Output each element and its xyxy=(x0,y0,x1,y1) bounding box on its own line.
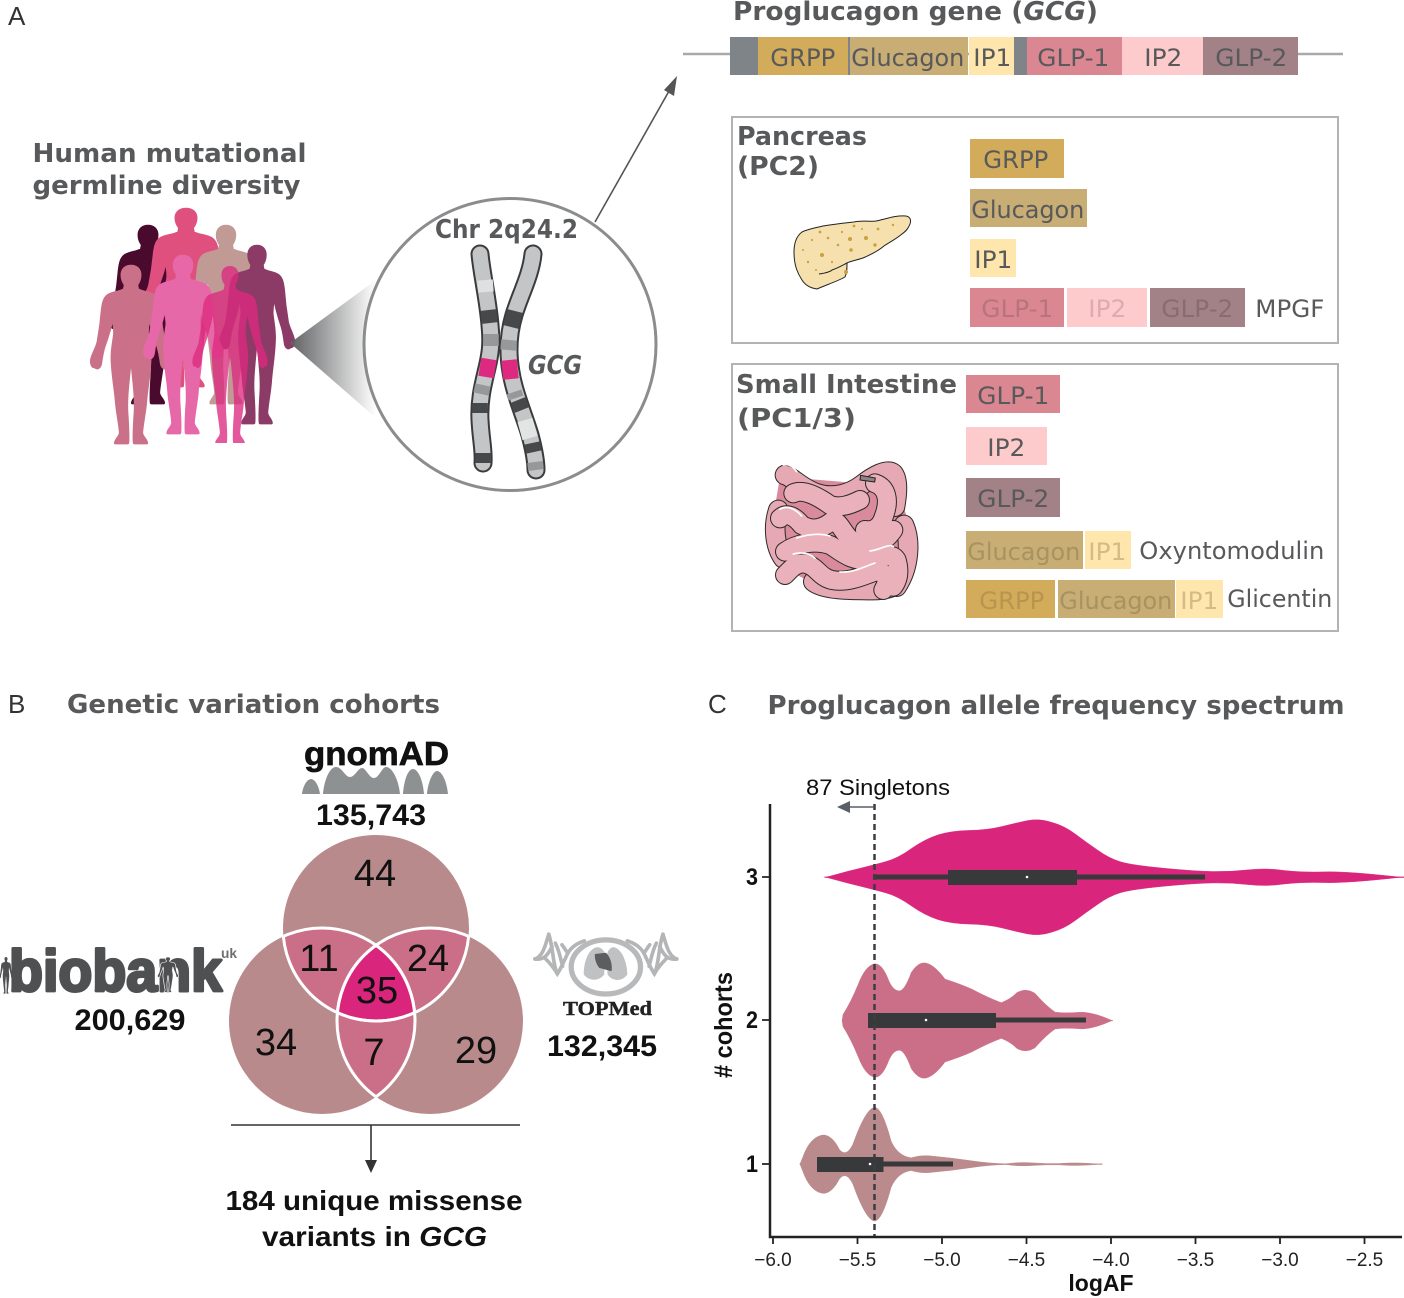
icon: chromosome xyxy=(480,254,536,470)
heading: human mutational germline diversity xyxy=(32,139,306,201)
zoom fan from people to chromosome lens xyxy=(290,280,376,418)
text: summary: 184 unique missense xyxy=(226,1185,522,1216)
venn counts: 7 xyxy=(363,1032,385,1074)
heading: small intestine PC1/3: Small Intestine xyxy=(736,370,957,400)
x tick labels: −4.5 xyxy=(1008,1250,1045,1271)
chart: venn diagram xyxy=(229,835,523,1114)
y tick labels: 3 xyxy=(746,864,758,891)
bars: oxyntomodulin: Glucagon xyxy=(967,538,1080,566)
heading: small intestine PC1/3 xyxy=(736,370,957,434)
heading: human mutational germline diversity: Human mutational xyxy=(32,139,306,169)
heading: pancreas PC2 xyxy=(737,122,867,182)
panel: pancreas xyxy=(732,117,1338,343)
chromosome lens circle xyxy=(364,198,656,490)
count: TOPMed: 132,345 xyxy=(547,1030,657,1063)
x tick labels: −6.0 xyxy=(754,1250,792,1271)
bars: oxyntomodulin: IP1 xyxy=(1088,538,1126,566)
logo: gnomAD xyxy=(302,735,449,794)
bars: MPGF fragments: GLP-2 xyxy=(1161,295,1233,323)
bars: oxyntomodulin xyxy=(966,531,1324,569)
axes xyxy=(762,804,1402,1244)
bars: oxyntomodulin: Oxyntomodulin xyxy=(1139,537,1324,565)
bar: GLP-2 xyxy=(966,478,1060,517)
x tick labels: −3.0 xyxy=(1261,1250,1299,1271)
bars: glicentin: GRPP xyxy=(979,587,1044,615)
violin: 1 cohort xyxy=(800,1107,1102,1221)
heading: pancreas PC2: (PC2) xyxy=(737,152,819,182)
bar: IP2: IP2 xyxy=(987,434,1025,462)
x tick labels: −2.5 xyxy=(1346,1250,1383,1271)
bars: MPGF fragments xyxy=(970,288,1324,327)
count: gnomAD: 135,743 xyxy=(316,799,426,832)
bar: IP1: IP1 xyxy=(974,246,1012,274)
venn counts: 44 xyxy=(354,853,396,895)
bars: glicentin: IP1 xyxy=(1180,587,1218,615)
gene diagram: GLP-2 xyxy=(1215,44,1287,72)
venn counts: 29 xyxy=(455,1030,497,1072)
logo: TOPMed: TOPMed xyxy=(563,998,652,1020)
text: summary xyxy=(226,1185,522,1252)
panel label C: C xyxy=(708,689,727,719)
text: summary: variants in GCG xyxy=(262,1221,487,1252)
bar: Glucagon: Glucagon xyxy=(971,196,1084,224)
heading: genetic variation cohorts: Genetic variation cohorts xyxy=(67,690,440,720)
bars: glicentin: Glicentin xyxy=(1227,585,1332,613)
singleton threshold line xyxy=(873,804,876,1237)
x tick labels: −3.5 xyxy=(1177,1250,1214,1271)
logo: gnomAD: gnomAD xyxy=(304,735,449,772)
gene diagram: IP2 xyxy=(1144,44,1182,72)
logo: TOPMed xyxy=(535,934,677,1020)
heading: small intestine PC1/3: (PC1/3) xyxy=(737,404,856,434)
x axis title: logAF xyxy=(1068,1270,1134,1296)
venn counts xyxy=(255,853,497,1074)
violin: 3 cohorts xyxy=(825,820,1404,935)
gene diagram: Glucagon xyxy=(851,44,964,72)
violin: 2 cohorts xyxy=(842,963,1113,1078)
y tick labels xyxy=(746,864,758,1178)
venn counts: 35 xyxy=(356,970,398,1012)
bars: glicentin: Glucagon xyxy=(1059,587,1172,615)
heading: human mutational germline diversity: germline diversity xyxy=(32,171,301,201)
arrow: singletons xyxy=(837,801,874,813)
boxplots xyxy=(817,870,1205,1172)
x tick labels: −5.5 xyxy=(839,1250,876,1271)
bar: GRPP: GRPP xyxy=(983,146,1048,174)
bars: MPGF fragments: IP2 xyxy=(1088,295,1126,323)
panel label A: A xyxy=(8,1,26,31)
label: 87 singletons: 87 Singletons xyxy=(806,775,950,800)
venn counts: 34 xyxy=(255,1022,297,1064)
icon: small intestine xyxy=(773,465,913,597)
x tick labels: −5.0 xyxy=(923,1250,961,1271)
icon: pancreas xyxy=(794,216,911,289)
venn counts: 11 xyxy=(299,938,339,980)
bars: glicentin xyxy=(966,580,1332,618)
bar: GLP-1: GLP-1 xyxy=(977,382,1049,410)
x tick labels xyxy=(754,1250,1383,1271)
bar: IP1 xyxy=(970,239,1016,277)
arrow: chromosome to gene xyxy=(595,76,677,222)
panel: small intestine xyxy=(732,364,1338,631)
bar: GLP-1 xyxy=(966,375,1060,413)
gene diagram: GRPP xyxy=(770,44,835,72)
bar: GRPP xyxy=(970,139,1064,178)
label: Chr 2q24.2: Chr 2q24.2 xyxy=(435,215,578,245)
bars: MPGF fragments: MPGF xyxy=(1255,295,1324,323)
x tick labels: −4.0 xyxy=(1092,1250,1130,1271)
bar: IP2 xyxy=(966,427,1047,465)
panel label B: B xyxy=(8,689,25,719)
icon: group of human silhouettes xyxy=(91,209,294,443)
gene diagram: IP1 xyxy=(973,44,1011,72)
heading: allele frequency spectrum: Proglucagon allele frequency spectrum xyxy=(768,691,1344,721)
logo: UK biobank: biobank xyxy=(9,939,223,1004)
bar: GLP-2: GLP-2 xyxy=(977,485,1049,513)
y tick labels: 2 xyxy=(746,1007,758,1034)
heading: pancreas PC2: Pancreas xyxy=(737,122,867,152)
gene diagram: GLP-1 xyxy=(1037,44,1109,72)
y tick labels: 1 xyxy=(746,1151,758,1178)
venn counts: 24 xyxy=(407,938,449,980)
bars: MPGF fragments: GLP-1 xyxy=(981,295,1053,323)
y axis title: # cohorts xyxy=(710,972,738,1078)
chart: violin plot xyxy=(710,775,1404,1296)
logo: UK biobank: uk xyxy=(221,945,237,961)
count: UK biobank: 200,629 xyxy=(74,1004,186,1037)
gene diagram xyxy=(683,37,1343,75)
label: GCG: GCG xyxy=(528,351,582,381)
arrow: venn to summary xyxy=(231,1125,520,1173)
